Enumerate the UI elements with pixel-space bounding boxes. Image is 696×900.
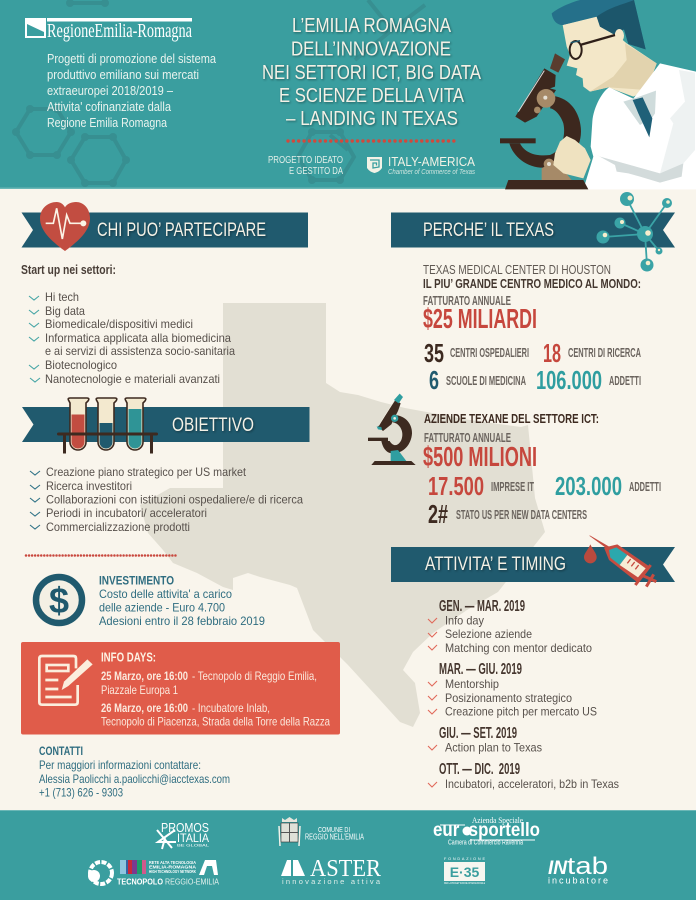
logo: eurosportello: Camera di Commercio Ravenna [448,840,523,846]
banner: perche' il texas [391,212,675,248]
icon: test tubes [57,398,158,454]
panel: contatti [39,744,230,800]
stat: 203.000 addetti: 203.000 [555,471,622,501]
logo: eurosportello: eur sportello [433,820,540,841]
header band [0,0,696,189]
timeline: gen-mar 2019: Info day [445,614,484,628]
info days text: - Tecnopolo di Reggio Emilia, [192,669,317,683]
stat: 35 centri ospedalieri: CENTRI OSPEDALIERI [450,346,529,360]
checklist: sectors: e ai servizi di assistenza socio-sanitaria [45,344,235,358]
timeline: gen-mar 2019: Selezione aziende [445,627,532,641]
logo: eurosportello [433,816,540,846]
icon: syringe and blood drop [584,536,656,587]
icon: molecule [596,192,672,272]
timeline: ott-dic 2019 [428,761,619,791]
info days text: Tecnopolo di Piacenza, Strada della Torre della Razza [101,714,330,728]
stat: 18 centri di ricerca [543,338,641,368]
stat: 18 centri di ricerca: CENTRI DI RICERCA [568,346,641,360]
logo: INtab incubatore: IN [548,858,568,879]
banner: chi puo' partecipare [22,212,308,248]
logo: Aster [281,856,381,886]
panel: attivita' e timing [391,536,675,791]
heading: aziende texane: AZIENDE TEXANE DEL SETTORE ICT: [424,412,599,426]
banner: obiettivo [22,407,310,442]
checklist: objectives: Periodi in incubatori/ acceleratori [46,506,207,520]
logo: INtab incubatore: tab [567,853,608,880]
heading: Texas Medical Center [423,263,641,291]
heading: Texas Medical Center: TEXAS MEDICAL CENTER DI HOUSTON [423,263,611,277]
title: NEI SETTORI ICT, BIG DATA [262,62,482,84]
checklist: objectives: Ricerca investitori [46,479,132,493]
lead text: Start up nei settori: [21,263,116,277]
heading: Texas Medical Center: IL PIU’ GRANDE CENTRO MEDICO AL MONDO: [423,277,641,291]
organiser note: PROGETTO IDEATO [268,154,343,166]
timeline: mar-giu 2019 [428,661,597,718]
timeline: mar-giu 2019: MAR. — GIU. 2019 [439,661,522,678]
stat: 106.000 addetti: 106.000 [536,365,602,395]
intro text: Attivita' cofinanziate dalla [47,100,171,114]
checklist: objectives: Collaborazioni con istituzioni ospedaliere/e di ricerca [46,492,303,506]
checklist: sectors [29,290,235,386]
stat: fatturato 500 milioni [423,431,537,472]
timeline: giu-set 2019 [428,725,542,754]
panel: contatti: CONTATTI [39,744,83,758]
stat: fatturato 500 milioni: FATTURATO ANNUALE [424,431,511,445]
intro text [47,52,216,130]
title [262,15,482,130]
logo: Fondazione E35: PER LA PROGETTAZIONE INTERNAZIONALE [444,881,485,885]
illustration: scientist at microscope [500,0,696,189]
panel: contatti: Alessia Paolicchi a.paolicchi@iacctexas.com [39,772,230,786]
info days text: INFO DAYS: [101,650,156,664]
logo: Promos Italia: PROMOS [161,820,209,835]
banner: chi puo' partecipare: CHI PUO’ PARTECIPARE [97,220,266,241]
logo: eurosportello: Azienda Speciale [472,816,523,825]
title: – LANDING IN TEXAS [286,108,458,130]
checklist: objectives [30,465,303,534]
panel: contatti: +1 (713) 626 - 9303 [39,786,123,800]
icon: heart with pulse [40,202,90,251]
logo: Italy-America Chamber: ITALY-AMERICA [388,155,476,169]
logo: Promos Italia: ITALIA [177,833,209,845]
intro text: produttivo emiliano sui mercati [47,68,199,82]
intro text: Regione Emilia Romagna [47,116,167,130]
timeline: mar-giu 2019: Posizionamento strategico [445,691,572,705]
stat: 35 centri ospedalieri: 35 [424,338,444,368]
logo: Aster: innovazione attiva [282,877,381,886]
logo: Fondazione E35: E·35 [450,864,479,880]
logo: Italy-America Chamber: Chamber of Commerce of Texas [388,167,475,176]
timeline: gen-mar 2019: GEN. — MAR. 2019 [439,598,525,615]
stat: 6 scuole di medicina: 6 [429,365,439,395]
investment text: Costo delle attivita' a carico [99,587,232,601]
panel: aziende texane ICT [368,394,661,529]
timeline: giu-set 2019: Action plan to Texas [445,740,542,754]
banner: obiettivo: OBIETTIVO [172,415,254,436]
logo: Tecnopolo Reggio-Emilia: RETE ALTA TECNOLOGIA [149,860,197,865]
panel: obiettivo [22,398,310,534]
organiser note: E GESTITO DA [289,165,343,177]
info days text: 26 Marzo, ore 16:00 [101,701,188,715]
info days text [101,650,330,728]
stat: fatturato 25 miliardi [423,294,537,334]
logo: INtab incubatore: incubatore [548,876,608,886]
checklist: sectors: Biomedicale/dispositivi medici [45,317,193,331]
icon: microscope [368,394,416,465]
stat: 18 centri di ricerca: 18 [543,338,561,368]
logo: Promos Italia: BE GLOBAL [177,844,209,848]
checklist: objectives: Commercializzazione prodotti [46,520,190,534]
footer: partner logos [0,810,696,900]
timeline: mar-giu 2019: Mentorship [445,677,499,691]
panel: investimento [36,574,265,628]
logo: Comune di Reggio nell'Emilia [279,817,364,846]
info days text: 25 Marzo, ore 16:00 [101,669,188,683]
logo: Tecnopolo Reggio-Emilia: TECNOPOLO [117,878,163,886]
logo: Tecnopolo Reggio-Emilia: REGGIO-EMILIA [165,878,220,886]
stat: 6 scuole di medicina [429,365,526,395]
stat: 17.500 imprese IT: IMPRESE IT [491,480,534,494]
logo: Regione Emilia-Romagna [25,18,192,42]
timeline: mar-giu 2019: Creazione pitch per mercato US [445,704,597,718]
stat: 106.000 addetti: ADDETTI [609,374,641,388]
checklist: sectors: Nanotecnologie e materiali avanzati [45,372,220,386]
stat: 203.000 addetti: ADDETTI [629,480,661,494]
timeline: gen-mar 2019 [428,598,592,655]
logo: Aster: ASTER [310,856,381,882]
investment text: Adesioni entro il 28 febbraio 2019 [99,614,265,628]
icon: document with pen [39,656,93,705]
panel: info days [21,642,340,734]
logo: Tecnopolo Reggio-Emilia: EMILIA-ROMAGNA [149,864,197,870]
stat: fatturato 25 miliardi: FATTURATO ANNUALE [423,294,511,308]
timeline: ott-dic 2019: Incubatori, acceleratori, b2b in Texas [445,777,619,791]
stat: fatturato 500 milioni: $500 MILIONI [423,441,537,472]
logo: Comune di Reggio nell'Emilia: REGGIO NELL’EMILIA [305,832,364,842]
checklist: objectives: Creazione piano strategico per US market [46,465,247,479]
info days text: - Incubatore Inlab, [192,701,270,715]
stat: 35 centri ospedalieri [424,338,529,368]
panel: contatti: Per maggiori informazioni contattare: [39,758,201,772]
organiser note [268,154,343,177]
stat: 17.500 imprese IT: 17.500 [428,471,484,501]
icon: dollar coin [36,577,82,623]
logo: Tecnopolo Reggio-Emilia [88,860,220,886]
stat: 2# stato US [428,499,587,529]
banner: attivita' e timing: ATTIVITA’ E TIMING [425,554,566,575]
logo: Fondazione E35 [444,857,485,885]
checklist: sectors: Biotecnologico [45,358,117,372]
title: L’EMILIA ROMAGNA [292,15,452,37]
investment text [99,574,265,628]
checklist: sectors: Hi tech [45,290,79,304]
intro text: extraeuropei 2018/2019 – [47,84,173,98]
stat: 2# stato US: STATO US PER NEW DATA CENTERS [456,508,587,522]
stat: 6 scuole di medicina: SCUOLE DI MEDICINA [446,374,526,388]
logo: Tecnopolo Reggio-Emilia: HIGH TECHNOLOGY NETWORK [149,869,197,874]
stat: fatturato 25 miliardi: $25 MILIARDI [423,303,537,334]
logo: Regione Emilia-Romagna: RegioneEmilia-Romagna [47,20,192,42]
title: DELL’INNOVAZIONE [291,38,451,60]
info days text: Piazzale Europa 1 [101,683,178,697]
icon: dollar coin: $ [49,580,69,621]
panel: chi puo' partecipare [21,202,308,386]
logo: Comune di Reggio nell'Emilia: COMUNE DI [318,827,350,834]
checklist: sectors: Informatica applicata alla biomedicina [45,331,231,345]
checklist: sectors: Big data [45,304,85,318]
panel: perche' il texas [391,192,675,395]
investment text: INVESTIMENTO [99,574,174,588]
logo: Fondazione E35: FONDAZIONE [444,857,485,861]
logo: Promos Italia [157,820,209,849]
title: E SCIENZE DELLA VITA [279,85,465,107]
banner: perche' il texas: PERCHE’ IL TEXAS [423,220,554,241]
timeline: ott-dic 2019: OTT. — DIC. 2019 [439,761,520,778]
logo: INtab incubatore [548,853,608,886]
stat: 2# stato US: 2# [428,499,448,529]
banner: attivita' e timing [391,547,675,582]
investment text: delle aziende - Euro 4.700 [99,600,225,614]
logo: Italy-America Chamber [367,155,476,176]
intro text: Progetti di promozione del sistema [47,52,216,66]
timeline: giu-set 2019: GIU. — SET. 2019 [439,725,517,742]
timeline: gen-mar 2019: Matching con mentor dedicato [445,641,592,655]
